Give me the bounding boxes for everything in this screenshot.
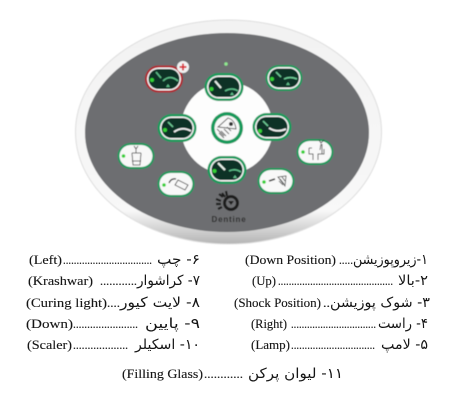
- button: chair: [296, 139, 334, 165]
- item 6: ۶- چپ: [157, 252, 200, 268]
- item 9: ۹- پایین: [145, 316, 200, 332]
- item 6: .................................: [63, 253, 152, 267]
- item 2: [252, 273, 428, 289]
- item 1: .....: [339, 253, 353, 267]
- item 10: [27, 337, 200, 353]
- panel face: [85, 33, 369, 232]
- item 2: (Up): [252, 274, 276, 288]
- button: lamp: [258, 168, 294, 194]
- item 4: ۴- راست: [378, 316, 428, 332]
- item 7: (Krashwar): [28, 274, 93, 288]
- item 7: [28, 273, 200, 289]
- item 8: (Curing light): [26, 296, 107, 310]
- item 5: ۵- لامپ: [381, 337, 428, 353]
- item 10: (Scaler): [27, 338, 72, 352]
- button: filling glass: [118, 143, 154, 169]
- item 5: (Lamp): [251, 338, 290, 352]
- item 9: [26, 316, 200, 332]
- panel: control panel: [76, 20, 382, 244]
- item 6: [29, 252, 200, 268]
- item 1: ۱-زیروپوزیشن: [353, 252, 428, 268]
- item 8: ۸- لایت کیور: [119, 295, 201, 311]
- item 9: .......................: [73, 317, 138, 331]
- item 4: (Right): [251, 317, 287, 331]
- button: left: [158, 114, 196, 142]
- legend: item 11: ۱۱- لیوان پرکن: [248, 366, 343, 382]
- item 10: ...................: [73, 338, 128, 352]
- button: down position (red): [145, 61, 189, 92]
- item 9: (Down): [26, 317, 73, 331]
- item 10: ۱۰- اسکیلر: [134, 337, 200, 353]
- indicator light: [224, 62, 228, 66]
- item 4: [251, 316, 428, 332]
- logo: Dentine: [212, 191, 246, 224]
- item 3: ..: [323, 296, 330, 310]
- item 7: ............: [100, 274, 137, 288]
- item 3: ۳- شوک پوزیشن: [330, 295, 430, 311]
- item 2: ۲-بالا: [398, 273, 428, 289]
- item 3: (Shock Position): [234, 296, 321, 310]
- item 8: [26, 295, 201, 311]
- item 8: ....: [107, 296, 120, 310]
- legend: item 11: [122, 366, 343, 382]
- button: right: [252, 113, 292, 141]
- button: curing light (centre): [211, 112, 243, 144]
- panel bezel: [76, 20, 382, 244]
- legend: right column: [234, 252, 430, 353]
- legend: item 11: ............: [204, 367, 243, 381]
- button: down: [208, 156, 246, 184]
- item 1: [245, 252, 428, 268]
- centre white circle: [181, 82, 273, 174]
- item 5: ...............................: [291, 338, 375, 352]
- button: shock position: [266, 65, 302, 91]
- button: scaler: [158, 171, 194, 197]
- legend: item 11: (Filling Glass): [122, 367, 203, 381]
- item 3: [234, 295, 430, 311]
- item 7: ۷- کراشوار: [136, 273, 200, 289]
- item 4: ................................: [291, 317, 376, 331]
- item 5: [251, 337, 428, 353]
- logo: Dentine: Dentine: [212, 215, 246, 224]
- item 2: ...........................................: [278, 274, 393, 288]
- button: up: [204, 73, 244, 101]
- item 1: (Down Position): [245, 253, 336, 267]
- item 6: (Left): [29, 253, 62, 267]
- legend: left column: [26, 252, 201, 353]
